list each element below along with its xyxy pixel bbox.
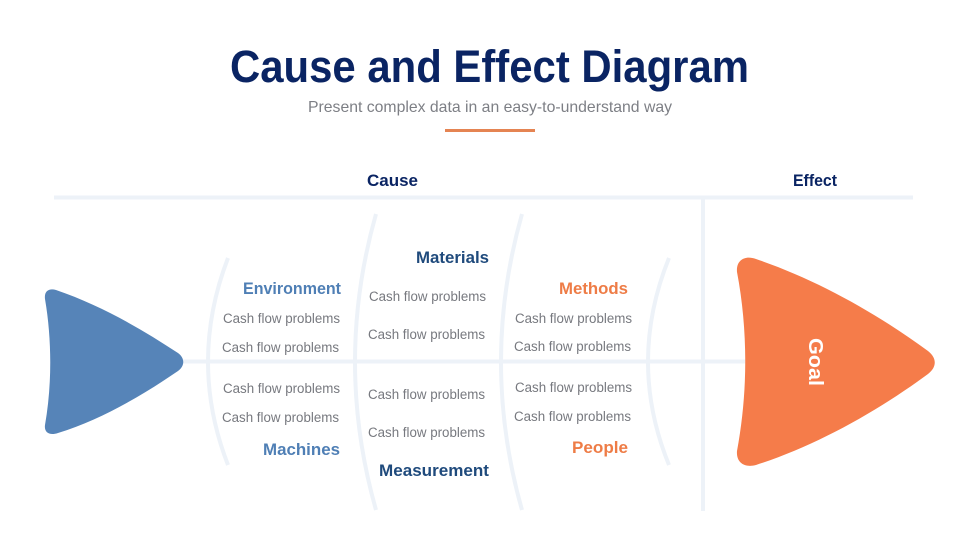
group: machines (222, 381, 340, 459)
group: environment (222, 279, 341, 355)
group: measurement: Measurement (379, 461, 489, 480)
fish tail (45, 289, 183, 434)
group: materials (368, 248, 489, 342)
group: measurement: Cash flow problems (368, 425, 485, 440)
group: machines: Machines (263, 440, 340, 459)
group: people: Cash flow problems (515, 380, 632, 395)
group: methods (514, 279, 632, 354)
goal label: Goal (804, 338, 826, 386)
group: environment: Cash flow problems (223, 311, 340, 326)
group: measurement (368, 387, 489, 480)
group: environment: Cash flow problems (222, 340, 339, 355)
title accent line (445, 129, 535, 132)
group: methods: Cash flow problems (514, 339, 631, 354)
group: machines: Cash flow problems (223, 381, 340, 396)
group: machines: Cash flow problems (222, 410, 339, 425)
title: Cause and Effect Diagram (230, 41, 749, 92)
subtitle: Present complex data in an easy-to-understand way (308, 99, 672, 116)
group: materials: Cash flow problems (369, 289, 486, 304)
effect heading: Effect (793, 171, 837, 190)
group: measurement: Cash flow problems (368, 387, 485, 402)
group: people: Cash flow problems (514, 409, 631, 424)
group: materials: Materials (416, 248, 489, 267)
group: methods: Cash flow problems (515, 311, 632, 326)
group: materials: Cash flow problems (368, 327, 485, 342)
group: people: People (572, 438, 628, 457)
cause heading: Cause (367, 171, 418, 190)
group: environment: Environment (243, 279, 341, 298)
group: people (514, 380, 632, 457)
fishbone skeleton (54, 197, 913, 511)
group: methods: Methods (559, 279, 628, 298)
fish head (737, 258, 935, 466)
